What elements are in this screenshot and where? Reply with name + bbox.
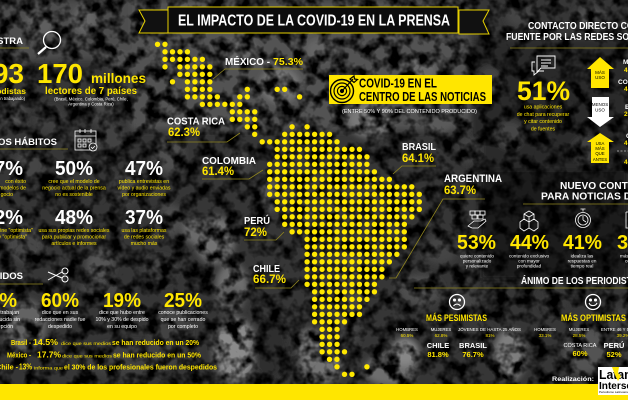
label: Costa Rica: 62.3% <box>168 125 200 139</box>
group: más pesimistas: HOMBRES <box>396 327 418 332</box>
stat: conoce publicaciones <box>158 310 208 316</box>
arrow: usa más que antes: ANTES <box>593 157 607 162</box>
label: México: MÉXICO - <box>225 55 270 68</box>
group: más pesimistas: 76.7% <box>462 350 484 359</box>
stat: periodistas <box>0 58 26 101</box>
arrow: usa más que antes: USA <box>596 141 605 146</box>
country labels <box>167 55 502 288</box>
stat: artículos e informes <box>51 241 97 247</box>
group: más pesimistas: MÁS PESIMISTAS <box>426 313 487 323</box>
stat: 51%: y citar contenido <box>524 119 562 125</box>
stat: 51%: 51% <box>517 76 570 106</box>
dotted map of Latin America <box>158 44 419 374</box>
stat: 37% <box>125 207 163 229</box>
country line: México: se han reducido en un 50% <box>113 352 202 360</box>
group: más pesimistas: JÓVENES DE HASTA 25 AÑOS <box>458 327 521 332</box>
label: Colombia: 61.4% <box>202 164 234 178</box>
stat: mucho más <box>131 241 158 247</box>
stat: clipped <box>617 232 628 264</box>
stat: despedido <box>48 324 72 330</box>
icon: cubes <box>520 211 538 231</box>
stat: lectores: (Brasil, México, Colombia, Perú, Chile, <box>54 96 128 102</box>
arrow: usa más que antes: QUE <box>595 151 605 156</box>
group: más optimistas: 28.5% <box>573 333 585 338</box>
stat: 44% <box>509 232 549 268</box>
callout heading: COVID-19 EN EL <box>359 76 437 90</box>
stat: 53% <box>457 232 496 268</box>
stat: 41%: 41% <box>563 232 602 254</box>
stat: trabajan <box>0 310 19 316</box>
stat: 25% <box>164 290 202 312</box>
icon: stopwatch <box>576 209 590 228</box>
icon: target <box>330 76 358 102</box>
panel: ánimo de los periodistas <box>396 274 628 359</box>
stat: dice que en sus <box>42 310 79 316</box>
panel: muestra <box>0 32 146 106</box>
country line: Brasil: Brasil - <box>11 340 32 347</box>
arrow: usa más que antes <box>587 133 614 163</box>
label: Argentina: ARGENTINA <box>444 173 502 185</box>
stat <box>35 290 85 330</box>
arrow: menos uso: USO <box>595 108 605 112</box>
callout: COVID-19 en el centro de las noticias: CENTRO DE LAS NOTICIAS <box>359 90 486 104</box>
arrow: más uso: USO <box>595 75 605 80</box>
panel: contacto directo <box>506 21 628 166</box>
stat: 44%: profundidad <box>517 264 542 268</box>
stat: 44%: contenido exclusivo <box>509 254 549 258</box>
stat: por organizaciones <box>122 192 166 198</box>
stat <box>0 158 26 198</box>
stat: cree que el modelo de <box>48 179 100 185</box>
group: más optimistas <box>534 313 628 359</box>
title text: EL IMPACTO DE LA COVID-19 EN LA PRENSA <box>178 12 450 30</box>
country line: México: México - <box>7 352 32 360</box>
group: más optimistas: COSTA RICA <box>564 343 597 349</box>
credit: realización: Realización: <box>552 376 594 383</box>
panel: despidos <box>0 268 217 372</box>
stat: en su equipo <box>107 324 137 330</box>
stat: 53%: quiere contenido <box>460 254 494 258</box>
stat: 51%: usa aplicaciones <box>524 104 563 110</box>
label: Colombia: COLOMBIA <box>202 155 256 167</box>
stat: para publicar y promocionar <box>42 234 106 240</box>
title box <box>168 7 458 33</box>
label: Chile <box>253 263 299 288</box>
stat: 44%: con mayor <box>518 258 540 264</box>
group: más pesimistas: 60.5% <box>401 333 413 338</box>
label: Perú: 72% <box>244 225 267 239</box>
stat: 51%: de fuentes <box>531 126 556 132</box>
stat: 41%: tiempo real <box>571 264 593 268</box>
country line: Chile: informa que <box>34 366 63 372</box>
panel: nuevos hábitos <box>0 129 171 247</box>
icon: scissors <box>48 268 68 282</box>
icon: sad face <box>450 294 464 310</box>
stat <box>122 207 167 247</box>
stat: 44%: 44% <box>510 232 549 254</box>
label: México: 75.3% <box>273 57 303 68</box>
icon: chat bubbles <box>532 56 555 75</box>
stat: publica entrevistas en <box>119 179 169 185</box>
group: más pesimistas: MUJERES <box>431 327 451 332</box>
stat: 53%: 53% <box>457 232 496 254</box>
country line: Chile: el 30% de los profesionales fueron despedidos <box>64 364 217 372</box>
stat: 51%: de chat para recuperar <box>517 112 570 118</box>
icon: calendar <box>75 129 97 151</box>
label: Costa Rica: COSTA RICA <box>167 116 225 128</box>
stat: 50% <box>55 158 93 180</box>
country line: Chile: 13% <box>19 362 32 372</box>
arrow: más uso <box>587 57 614 88</box>
stat: 41%: idealiza las <box>571 254 594 258</box>
stat: por completo <box>168 324 198 330</box>
stat: usa sus propias redes sociales <box>39 228 110 234</box>
group: más optimistas: 60% <box>572 349 588 358</box>
icon: magnifier <box>38 32 60 54</box>
arrow: más uso: MÁS <box>595 69 605 75</box>
stat: vídeo y audio enviadas <box>117 186 171 192</box>
stat: dice que hubo entre <box>99 310 145 316</box>
stat: lectores: Argentina y Costa Rica) <box>68 102 114 106</box>
label: Argentina: 63.7% <box>444 183 476 197</box>
country line: Brasil <box>11 337 200 347</box>
arrow: menos uso: MENOS <box>592 102 608 107</box>
clipped country stats <box>617 57 628 166</box>
label: Perú <box>244 214 284 240</box>
label: México <box>213 55 303 79</box>
stat: lectores: lectores de 7 países <box>45 86 137 97</box>
stat <box>95 290 149 330</box>
stat: lectores <box>37 58 146 106</box>
stat <box>0 207 33 240</box>
group: más pesimistas: BRASIL <box>459 341 487 350</box>
stat <box>0 290 20 330</box>
title banner <box>139 7 489 34</box>
stat: 53%: personalizado <box>463 258 492 264</box>
stat: lectores: millones <box>91 71 146 86</box>
stat: 47% <box>125 158 163 180</box>
label: Chile: 66.7% <box>253 272 286 286</box>
ribbon tails <box>139 10 489 34</box>
group: más optimistas: 33.1% <box>539 333 551 338</box>
country line: México <box>7 350 202 360</box>
stat <box>158 290 208 330</box>
stat <box>39 207 110 247</box>
group: más optimistas: PERÚ <box>604 341 624 350</box>
label: Brasil: 64.1% <box>402 151 434 165</box>
group: más optimistas: 52% <box>606 350 622 359</box>
stat: 60% <box>41 290 79 312</box>
stat: 53%: y relevante <box>466 264 489 268</box>
stat: usa las plataformas <box>122 228 167 234</box>
bottom yellow bar <box>0 384 628 400</box>
stat: 19% <box>103 290 141 312</box>
stat: gocio <box>1 192 13 198</box>
callout note: (ENTRE 50% Y 90% DEL CONTENIDO PRODUCIDO) <box>342 109 477 115</box>
country line: Brasil: 14.5% <box>33 337 58 347</box>
group: más optimistas: HOMBRES <box>534 327 556 332</box>
group: más pesimistas: 81.8% <box>427 350 449 359</box>
icon: happy face <box>586 294 600 310</box>
group: más pesimistas <box>396 313 521 359</box>
arrow: menos uso <box>587 97 614 127</box>
label: Argentina <box>389 173 502 278</box>
group: más optimistas: MUJERES <box>569 327 589 332</box>
label: Brasil <box>393 141 437 174</box>
group: más pesimistas: 62.8% <box>435 333 447 338</box>
stat: redacciones nadie fue <box>35 317 85 323</box>
label: Colombia <box>202 155 263 179</box>
icon: hand with boxes <box>468 211 486 228</box>
stat <box>42 158 106 198</box>
stat: 51% <box>517 76 570 132</box>
label: Brasil: BRASIL <box>402 141 437 153</box>
stat: de redes sociales <box>124 234 165 240</box>
stat: 10% y 30% de despido <box>95 317 149 323</box>
label: Chile: CHILE <box>253 263 280 275</box>
stat: 48% <box>55 207 93 229</box>
country line: México: 17.7% <box>37 350 61 360</box>
country line: Brasil: dice que sus medios <box>61 341 112 347</box>
stat: con éxito <box>5 179 26 185</box>
label: Perú: PERÚ <box>244 214 270 227</box>
callout: COVID-19 en el centro de las noticias <box>329 75 492 115</box>
label: Costa Rica <box>167 116 240 142</box>
stat: que se han cerrado <box>161 317 205 323</box>
country line: Brasil: se han reducido en un 20% <box>112 340 200 347</box>
logo: Latam Intersect <box>598 367 628 395</box>
stat: no es sostenible <box>55 192 93 198</box>
stat: negocio actual de la prensa <box>42 186 106 192</box>
stat: 41%: respuestas en <box>568 258 597 264</box>
panel: nuevo contenido <box>457 180 628 268</box>
group: más pesimistas: CHILE <box>427 341 449 350</box>
group: más pesimistas: 81% <box>485 333 495 338</box>
stat <box>117 158 171 198</box>
country line: México: dice que sus medios <box>62 354 113 360</box>
country line: Chile <box>0 362 217 372</box>
icon: device, clipped <box>626 212 628 228</box>
stat: lectores: 170 <box>37 58 83 89</box>
stat: 41% <box>563 232 602 268</box>
arrow: usa más que antes: MÁS <box>595 146 605 151</box>
